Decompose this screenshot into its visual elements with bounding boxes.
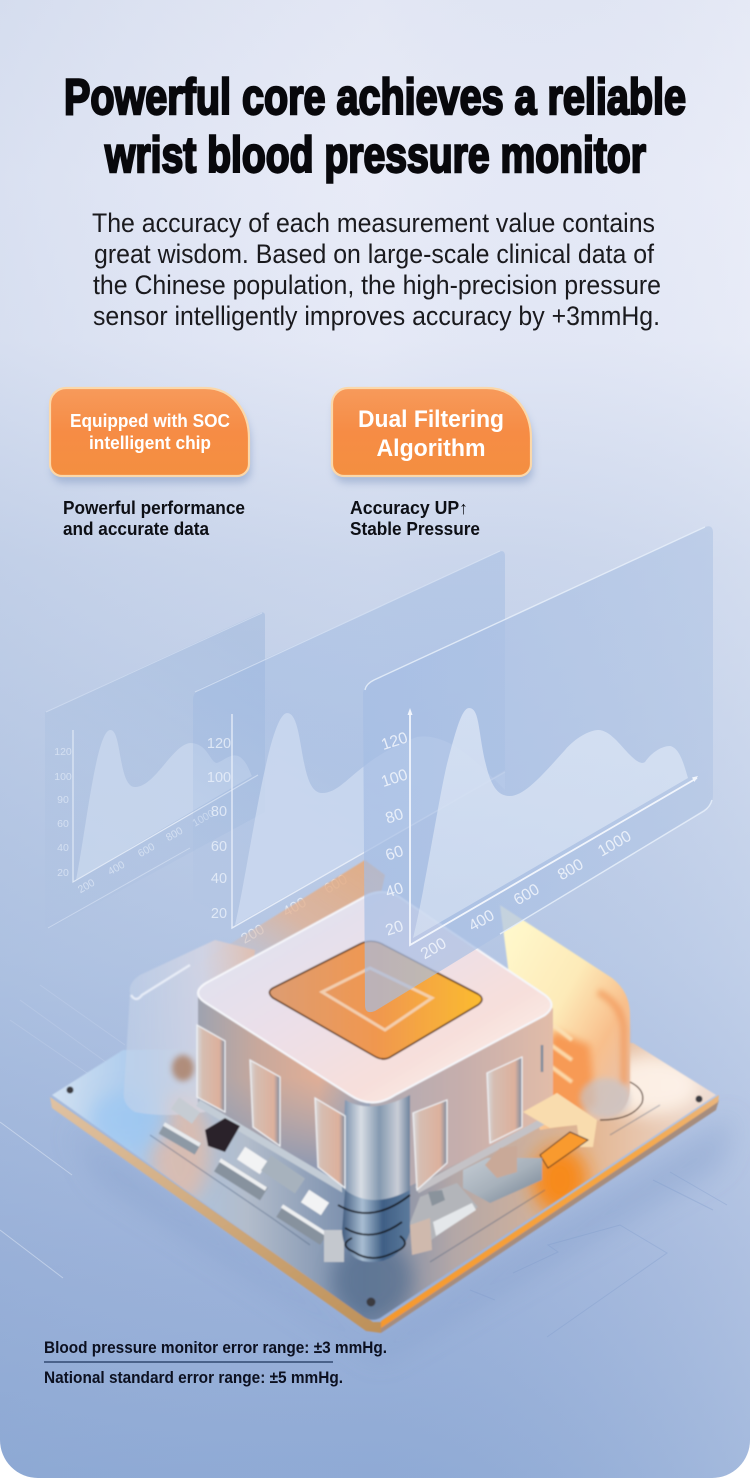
chart panel: front: 20 [384,918,406,940]
board left edge [50,1097,381,1333]
title [64,69,686,183]
chart panel: front: 60 [384,843,406,865]
chart panel: far left: 20 [57,867,69,879]
chart panel: far left: 600 [136,841,157,860]
error range note: Blood pressure monitor error range: ±3 mmHg. [44,1339,387,1357]
intro paragraph: The accuracy of each measurement value contains [92,208,655,238]
chart panel: far left: 400 [106,859,127,878]
right shell fins [549,1025,572,1082]
intro paragraph [92,208,661,331]
chart panel: middle: 600 [322,872,350,898]
chart panel: middle: 60 [211,839,227,855]
right shell base glass [580,1078,630,1118]
chart panel: far left [45,612,265,928]
chart panel: front [363,526,713,1012]
feature text: dual filtering: Accuracy UP↑ [350,498,468,518]
pillars [197,1025,542,1190]
feature text: dual filtering [350,498,480,539]
right shell inner glow [527,1030,595,1125]
feature text: dual filtering: Stable Pressure [350,519,480,539]
chart panel: middle: 100 [207,770,231,786]
chart panel: front: 200 [418,935,450,963]
right base ledge [417,1116,553,1190]
orange slot [540,1132,588,1168]
left shell highlight [131,965,190,999]
intro paragraph: sensor intelligently improves accuracy by +3mmHg. [93,301,660,331]
chart panel: middle [193,551,505,948]
right shell orange edge [598,992,624,1085]
feature card: SOC chip [50,388,251,483]
body right side [370,1008,553,1205]
chart panel: far left: 100 [54,771,72,783]
feature card: dual filtering [332,388,533,483]
corner cylinder [338,1095,410,1262]
orange clip [523,1093,597,1147]
board shadow [70,1115,735,1360]
inner ring [322,968,432,1030]
feature card: SOC chip: Equipped with SOC [70,410,230,431]
left translucent shell [124,940,255,1115]
chart panel: far left: 1000 [190,807,217,829]
feature text: SOC chip: and accurate data [63,519,210,539]
chart panel: far left: 90 [57,794,69,806]
brown blurred part [172,1055,194,1081]
chip illustration [40,860,735,1360]
chart panel: front: 80 [384,806,406,828]
chart panel: front: 800 [555,856,587,884]
board surface [52,1042,716,1320]
right shell [500,905,630,1130]
chart panel: front: 400 [466,907,498,935]
right shell base outline [600,1082,643,1120]
capacitor rods [162,1103,334,1262]
chart panel: middle: 40 [211,871,227,887]
error range note: National standard error range: ±5 mmHg. [44,1369,343,1387]
board right edge [381,1100,719,1333]
board right orange strip [381,1095,719,1328]
mounting holes [66,1086,702,1306]
feature card: dual filtering: Dual Filtering [358,406,504,433]
chart panel: far left: 120 [54,746,72,758]
chart panel: far left: 60 [57,818,69,830]
feature text: SOC chip: Powerful performance [63,498,245,518]
chart panel: middle: 400 [281,895,309,921]
chart panel: middle: 20 [211,906,227,922]
chart panel: front: 40 [384,880,406,902]
feature card: SOC chip: intelligent chip [89,432,211,453]
chart panel: front: 600 [511,881,543,909]
intro paragraph: the Chinese population, the high-precision pressure [93,270,661,300]
chart panel: front: 100 [379,766,410,791]
error range note [44,1339,387,1387]
intro paragraph: great wisdom. Based on large-scale clinical data of [94,239,655,269]
body left side [198,992,370,1205]
left base ledge [198,1103,345,1190]
right block component [463,1146,542,1203]
chart panel: far left: 40 [57,842,69,854]
chart panel: middle: 200 [239,922,267,948]
orange square [270,941,482,1059]
feature text: SOC chip [63,498,245,539]
chart panel: middle: 120 [207,736,231,752]
feature card: dual filtering: Algorithm [376,435,486,462]
chart panel: far left: 200 [76,877,97,896]
chart panel: middle: 80 [211,804,227,820]
connector [410,1183,478,1255]
chart panel: far left: 800 [164,825,185,844]
chart panel: front: 1000 [595,828,635,860]
back shell band [185,860,385,990]
chart panel: front: 120 [379,729,410,754]
top face [198,892,552,1102]
